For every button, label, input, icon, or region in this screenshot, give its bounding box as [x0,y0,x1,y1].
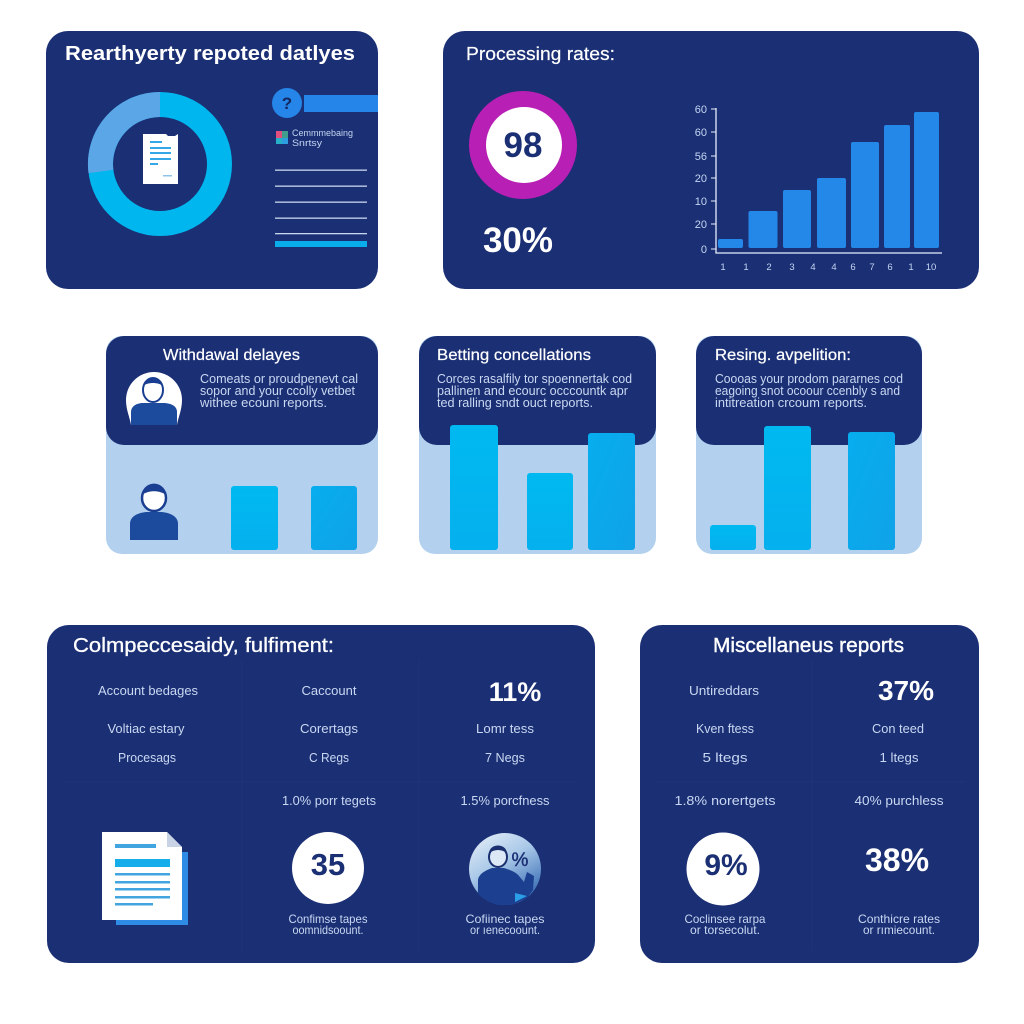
table text: oomnidsoount. [292,923,364,937]
table text: Voltiac estary [108,721,185,736]
body text: Coooas your prodom pararnes cod [715,372,903,386]
heading: withdrawal delays: Withdawal delayes [163,347,300,364]
table text: Corertags [300,721,359,736]
table text: 1 ltegs [880,750,919,765]
body text [199,372,358,410]
bar chart: 60 [695,104,707,116]
table text: Lomr tess [476,721,535,736]
body text: Corces rasalfily tor spoennertak cod [437,372,632,386]
table text: Confimse tapes [288,912,368,926]
table text: 1.8% norertgets [674,793,776,808]
bar chart: 6 [887,262,893,273]
bar chart: 4 [810,262,816,273]
heading: processing rates: Processing rates: [466,44,615,64]
bar chart: 3 [789,262,795,273]
table text: Procesags [118,750,176,765]
table text: Untireddars [689,683,760,698]
stat 11%: 11% [489,677,541,707]
table text: Coclinsee rarpa [684,912,766,926]
stat circle 9%: 9% [704,849,748,882]
panel: fulfilment [47,625,595,963]
bar chart [695,104,942,273]
bar chart: 20 [695,173,707,185]
heading: reported delays: Rearthyerty repoted datlyes [65,42,355,65]
bar chart: 10 [695,196,707,208]
bar chart: 6 [850,262,856,273]
table text: 1.5% porcfness [460,793,550,808]
panel: betting cancellations [419,336,656,554]
heading: miscellaneous: Miscellaneus reports [713,634,904,657]
legend text [292,128,353,149]
table text: Kven ftess [696,721,754,736]
table text: Con teed [872,721,924,736]
icon: document stack [102,832,188,925]
icon: person [130,484,178,540]
body text: pallinen and ecourc occcountk apr [437,384,628,398]
bar chart: 1 [743,262,749,273]
table text: Account bedages [98,683,198,698]
bar chart: 1 [908,262,914,273]
table dividers [64,660,578,950]
legend swatch [276,131,288,144]
table text [674,683,944,937]
legend text: Cemmmebaing [292,128,353,139]
bar chart: 20 [695,219,707,231]
table text: 7 Negs [485,750,525,765]
heading: resing: Resing. avpelition: [715,347,851,364]
ring stat 98: 98 [504,126,542,165]
table text: Cofiinec tapes [466,912,544,926]
bars [450,425,635,550]
table text: or torsecolut. [690,923,760,937]
stat circle 9% [686,832,760,906]
body text: withee ecouni reports. [199,396,327,410]
icon: person avatar [126,372,182,425]
table text: Caccount [302,683,357,698]
heading: betting cancellations: Betting concellations [437,347,591,364]
body text: ted ralling sndt ouct reports. [437,396,593,410]
table text: 40% purchless [854,793,944,808]
stat 38%: 38% [865,842,929,878]
list lines [275,170,367,247]
icon: question badge: ? [282,94,292,113]
ring stat 98 [469,91,577,199]
panel: withdrawal delays [106,336,378,554]
body text: sopor and your ccolly vetbet [200,384,356,398]
bars [231,486,357,550]
icon: person with percent: % [512,850,529,871]
table text: or ıenecoount. [470,923,540,937]
bar chart: 1 [720,262,726,273]
panel: resing application [696,336,922,554]
bar chart: 2 [766,262,772,273]
body text [715,372,903,410]
icon: document [143,134,178,184]
stat 37%: 37% [878,675,934,706]
bar chart: 7 [869,262,875,273]
table text: C Regs [309,750,349,765]
table dividers [657,660,965,950]
panel: miscellaneous reports [640,625,979,963]
panel: reported delays [46,31,378,289]
table text: 5 ltegs [702,750,748,765]
bar chart: 4 [831,262,837,273]
icon: question badge [272,88,378,118]
table text: or rımiecount. [863,923,935,937]
body text: intitreation crcoum reports. [715,396,867,410]
bar chart: 56 [695,151,707,163]
bar chart: 0 [701,244,707,256]
body text [437,372,632,410]
table text: Conthicre rates [858,912,940,926]
donut chart [100,104,220,224]
heading: fulfilment: Colmpeccesaidy, fulfiment: [73,635,334,657]
icon: person with percent [469,833,541,905]
stat circle 35: 35 [311,847,345,882]
table text: 1.0% porr tegets [282,793,376,808]
panel: processing rates [443,31,979,289]
bar chart: 60 [695,127,707,139]
body text: eagoing snot ocoour ccenbly s and [715,384,900,398]
bars [710,426,895,550]
stat 30%: 30% [483,221,553,260]
table text [98,683,550,937]
bar chart: 10 [926,262,936,273]
body text: Comeats or proudpenevt cal [200,372,358,386]
legend text: Snrtsy [292,138,322,149]
stat circle 35 [292,832,364,904]
